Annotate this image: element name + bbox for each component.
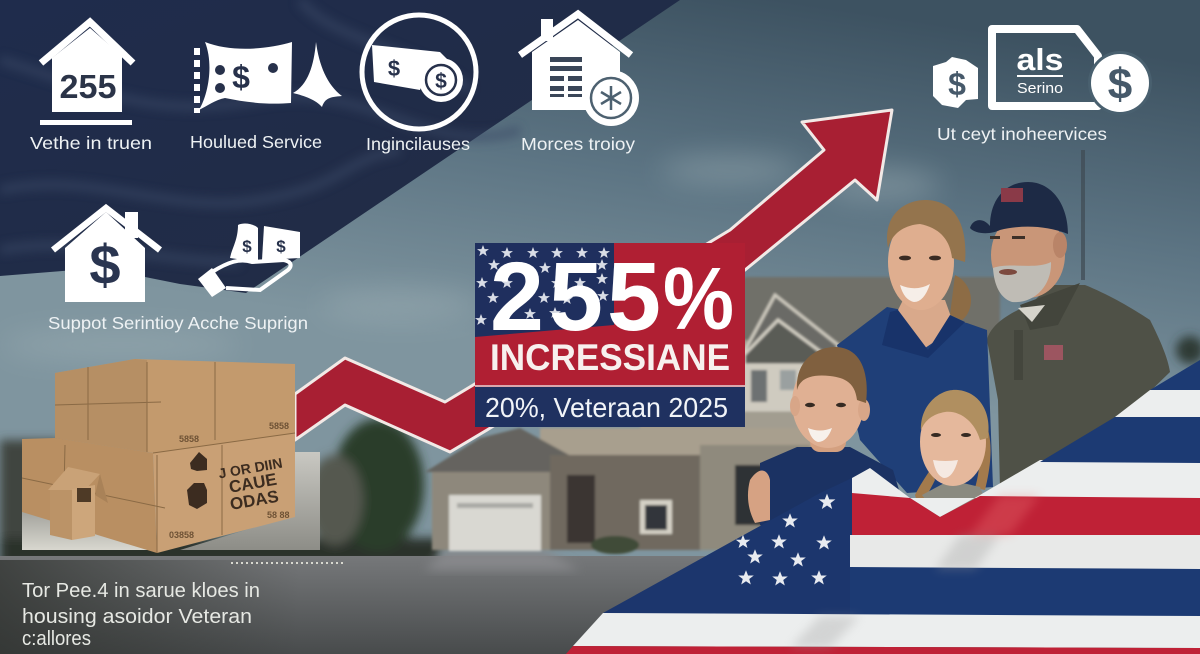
- box print text: [217, 455, 289, 515]
- icon: dollar house: $: [89, 233, 121, 296]
- man shirt: [987, 285, 1170, 490]
- boy ears: [790, 396, 870, 421]
- badge headline: 255: [490, 242, 661, 351]
- lower gable: [744, 320, 825, 365]
- background: road: [0, 556, 1200, 654]
- main roof: [720, 277, 1000, 400]
- icon: money circle: [362, 15, 476, 129]
- background: tree line: [0, 336, 1200, 566]
- upper windows: [745, 365, 805, 410]
- icon: hand with money: [198, 224, 300, 297]
- label: money circle: Ingincilauses: [366, 134, 470, 154]
- upper wall: [640, 340, 815, 450]
- badge headline: %: [663, 249, 734, 348]
- lower box right: [153, 433, 295, 553]
- red growth arrow: [295, 110, 892, 452]
- boy: [748, 347, 905, 540]
- flag canton: [603, 478, 852, 616]
- man cap: [970, 182, 1068, 234]
- background: utility pole: [1081, 150, 1085, 280]
- woman neck: [897, 300, 955, 350]
- pale right panel: [180, 452, 320, 550]
- flag middle white stripe: [850, 535, 1200, 569]
- flag folds: [0, 0, 520, 262]
- navy flag banner: [0, 0, 680, 293]
- icon: price tag with als Serino: [992, 29, 1152, 115]
- caption: bottom left: [22, 579, 260, 650]
- window: [640, 500, 672, 534]
- man: [970, 182, 1170, 490]
- background: clouds: [0, 156, 940, 361]
- lower band: [540, 428, 820, 456]
- icon: house with list and coin: [520, 14, 639, 126]
- box seams: [22, 362, 295, 553]
- woman face: [888, 214, 954, 310]
- small shed: [48, 467, 108, 540]
- woman shirt: [837, 307, 993, 493]
- boy smile: [808, 428, 832, 442]
- flag bottom red stripe: [566, 646, 1200, 654]
- man collar: [1020, 283, 1080, 330]
- right window: [735, 465, 765, 525]
- badge stars: [475, 245, 610, 325]
- caption: bottom left: c:allores: [22, 627, 91, 650]
- badge footer text: 20%, Veteraan 2025: [485, 392, 728, 423]
- badge canton: [475, 243, 614, 337]
- boy hair: [797, 347, 867, 403]
- girl hair: [921, 390, 989, 440]
- badge subhead: INCRESSIANE: [490, 337, 730, 378]
- right wall: [700, 445, 810, 550]
- woman eyes: [899, 256, 941, 260]
- box print text: CAUE: [227, 470, 278, 497]
- boy arm: [748, 471, 770, 523]
- woman collar: [882, 310, 965, 358]
- box print text: J OR DIIN: [217, 455, 284, 482]
- icon: hand with money: $: [242, 237, 252, 256]
- top box: [55, 359, 295, 453]
- background: driveway: [425, 550, 580, 570]
- girl shirt: [922, 480, 985, 520]
- label: house 255: Vethe in truen: [30, 133, 152, 153]
- icon: price tag with als Serino: $: [1108, 60, 1132, 109]
- badge red field: [475, 243, 745, 427]
- icon: small dollar tag: $: [948, 66, 966, 102]
- badge divider: [475, 385, 745, 387]
- gable: [744, 295, 838, 410]
- girl smile: [933, 460, 958, 478]
- man mouth: [999, 269, 1017, 275]
- pale floor panel: [22, 505, 160, 550]
- hazard marks: [187, 452, 207, 509]
- box stamps: 5858: [269, 421, 289, 431]
- stone wall: [550, 455, 700, 550]
- shrubs: [591, 536, 639, 554]
- wing roof: [425, 428, 600, 472]
- stat badge: [475, 242, 745, 427]
- man ear: [1053, 232, 1067, 258]
- icon: hand with money: $: [276, 237, 286, 256]
- boy shirt: [760, 447, 905, 540]
- box stamps: 5858: [179, 434, 199, 444]
- flag stars: [736, 494, 835, 586]
- front door: [567, 475, 595, 543]
- boy eyes: [805, 403, 846, 407]
- icon: money circle: $: [435, 70, 447, 93]
- icon: small dollar tag: [933, 57, 978, 108]
- girl braids: [915, 420, 991, 505]
- label: money flag: Houlued Service: [190, 132, 322, 152]
- girl eyes: [931, 433, 971, 437]
- man face: [991, 212, 1065, 298]
- garage wall: [432, 472, 550, 550]
- boy neck: [810, 430, 846, 452]
- family photograph: [748, 182, 1170, 540]
- lower box left: [22, 438, 157, 553]
- icon: price tag with als Serino: als: [1016, 42, 1064, 77]
- girl: [915, 390, 991, 520]
- man beard: [993, 262, 1051, 302]
- caption: bottom left: housing asoidor Veteran: [22, 605, 252, 628]
- man placket: [1014, 330, 1023, 380]
- box stamps: 03858: [169, 530, 194, 540]
- flag lower white stripe: [573, 613, 1200, 648]
- box stamps: 58 88: [267, 510, 290, 520]
- boy face: [792, 358, 864, 448]
- flag upper white: [1115, 390, 1200, 417]
- woman: [837, 200, 993, 493]
- box stamps: [169, 421, 290, 540]
- badge footer bar: [475, 387, 745, 427]
- man undershirt: [1018, 305, 1045, 322]
- icon: money circle: $: [388, 56, 400, 81]
- cap logo: [1001, 188, 1023, 202]
- flag top white stripe: [852, 460, 1200, 517]
- box print text: ODAS: [228, 487, 280, 514]
- garage door: [449, 495, 541, 551]
- icon: price tag with als Serino: Serino: [1017, 80, 1063, 97]
- background: road shadow: [0, 560, 600, 654]
- dotted road line: [231, 562, 345, 564]
- icon: house 255: 255: [60, 68, 116, 105]
- flag fold highlights: [790, 495, 1040, 648]
- caption: bottom left: Tor Pee.4 in sarue kloes in: [22, 579, 260, 602]
- icon: money flag: $: [232, 59, 250, 95]
- ponytail: [950, 275, 971, 320]
- icon: money flag: [197, 42, 342, 113]
- American flag foreground: [566, 360, 1200, 654]
- house photograph: [425, 277, 1000, 554]
- flag navy stripe: [850, 567, 1200, 617]
- label: services: Ut ceyt inoheervices: [937, 124, 1107, 144]
- man eyes: [990, 236, 1025, 239]
- flag red stripe: [852, 493, 1200, 536]
- girl face: [920, 398, 986, 486]
- flag navy stripe upper: [1040, 417, 1200, 463]
- cardboard boxes: [22, 359, 320, 553]
- icon: house 255: [40, 22, 133, 125]
- icon: dollar house: [53, 208, 160, 302]
- woman hair: [887, 200, 965, 262]
- flag top navy corner: [1150, 360, 1200, 390]
- woman smile: [900, 284, 930, 302]
- top box left face: [55, 359, 147, 452]
- man badge: [1044, 345, 1063, 360]
- label: support row: Suppot Serintioy Acche Suprign: [48, 313, 308, 333]
- label: house with list: Morces troioy: [521, 134, 635, 154]
